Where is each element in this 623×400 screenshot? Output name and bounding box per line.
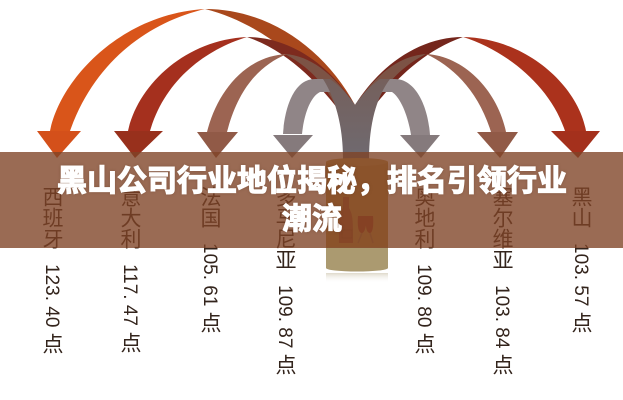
label: France: 法国 105. 61 点	[198, 186, 221, 333]
label: Serbia: 塞尔维亚 103. 84 点	[490, 186, 513, 375]
arrow: Serbia	[355, 54, 518, 158]
cylinder with bottle and glasses	[326, 158, 388, 283]
arrow: Montenegro	[355, 37, 600, 158]
label: Austria: 奥地利 109. 80 点	[412, 186, 435, 354]
label: Spain: 西班牙 123. 40 点	[40, 186, 63, 354]
label: Romania: 多马尼亚 109. 87 点	[273, 186, 296, 375]
arrow: Romania	[273, 79, 332, 158]
arrow: Spain	[37, 9, 355, 158]
title banner	[0, 152, 623, 248]
central trunk	[323, 79, 390, 160]
label: Italy: 意大利 117. 47 点	[118, 186, 141, 353]
arrow: Austria	[378, 79, 440, 158]
arrow: Italy	[114, 37, 355, 158]
arrow: France	[197, 54, 355, 158]
label: Montenegro: 黑山 103. 57 点	[569, 186, 592, 333]
title: 黑山公司行业地位揭秘，排名引领行业潮流	[57, 165, 567, 236]
